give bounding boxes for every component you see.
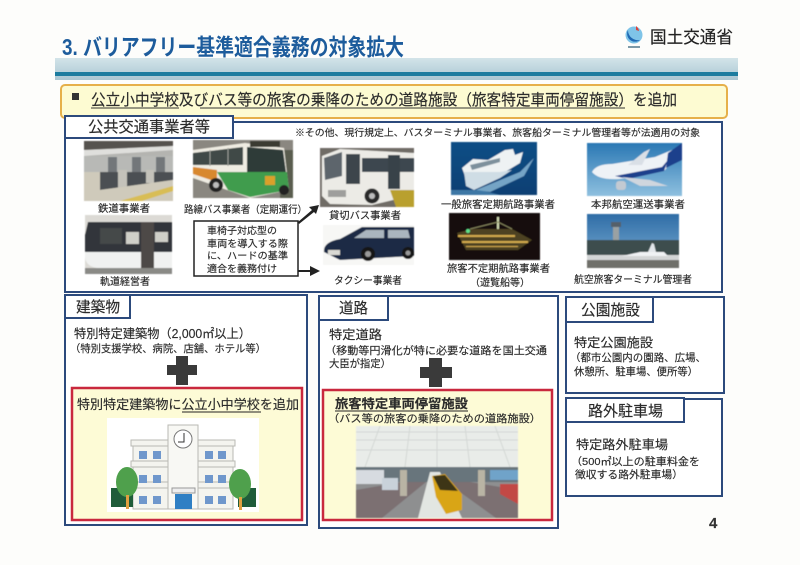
- panel: buildings: [65, 295, 307, 525]
- tab: buildings heading: 建築物: [76, 298, 120, 316]
- callout: passenger vehicle stops: [323, 390, 552, 520]
- title: 3. バリアフリー基準適合義務の対象拡大: [62, 34, 404, 60]
- text: special buildings: 特別特定建築物（2,000㎡以上）: [74, 326, 251, 341]
- tab: roads heading: [319, 296, 388, 320]
- panel: parks: [566, 297, 724, 393]
- label: chartered bus operators: 貸切バス事業者: [329, 209, 401, 222]
- tab: public transport heading: [65, 116, 233, 138]
- photo: passenger ferry: [451, 142, 537, 195]
- text: specified roads: 大臣が指定）: [329, 357, 391, 370]
- panel: off-road parking: [566, 398, 722, 496]
- arrow: to chartered bus: [298, 205, 319, 224]
- panel: roads: [319, 296, 558, 528]
- photo: airport terminal: [587, 214, 679, 268]
- tab: buildings heading: [65, 295, 130, 318]
- callout: wheelchair vehicle obligation: [194, 221, 298, 276]
- photo: airliner: [587, 143, 682, 196]
- icon: plus: [420, 358, 452, 387]
- callout: added public schools: [72, 388, 302, 520]
- text: specified parks: 休憩所、駐車場、便所等）: [574, 365, 698, 378]
- photo: route bus: [193, 140, 293, 198]
- callout: wheelchair vehicle obligation: 適合を義務付け: [207, 262, 277, 275]
- callout: wheelchair vehicle obligation: に、ハードの基準: [207, 249, 288, 262]
- icon: plus: [167, 356, 197, 385]
- callout: passenger vehicle stops: 旅客特定車両停留施設: [335, 396, 469, 411]
- header band: [55, 58, 738, 80]
- text: special buildings: [70, 326, 266, 355]
- text: specified parking: [571, 437, 700, 481]
- text: special buildings: （特別支援学校、病院、店舗、ホテル等）: [70, 342, 266, 355]
- label: railway operators: 鉄道事業者: [98, 202, 150, 215]
- callout: added public schools: 特別特定建築物に公立小中学校を追加: [77, 397, 299, 412]
- text: specified roads: 特定道路: [329, 327, 383, 342]
- logo: ministry emblem and name: [626, 26, 733, 48]
- text: specified parking: （500㎡以上の駐車料金を: [571, 455, 700, 468]
- label: scheduled passenger shipping: 一般旅客定期航路事業者: [441, 198, 555, 211]
- photo: railway platform: [84, 141, 173, 201]
- note: other applicable operators: ※その他、現行規定上、バスターミナル事業者、旅客船ターミナル管理者等が法適用の対象: [295, 127, 701, 139]
- tab: parks heading: 公園施設: [581, 302, 640, 319]
- callout: wheelchair vehicle obligation: 車椅子対応型の: [207, 224, 277, 237]
- page number: 4: [709, 515, 718, 532]
- logo: ministry emblem and name: 国土交通省: [650, 28, 733, 47]
- panel: public transport operators: [65, 116, 722, 292]
- label: airport terminal managers: 航空旅客ターミナル管理者: [574, 273, 692, 286]
- photo: taxi: [323, 225, 414, 265]
- label: non-scheduled passenger shipping: 旅客不定期航路事業者: [447, 262, 550, 275]
- text: specified parks: [570, 335, 706, 378]
- photo: tram: [85, 215, 172, 274]
- text: specified roads: [325, 327, 548, 370]
- text: specified parks: 特定公園施設: [574, 335, 654, 350]
- photo: chartered bus: [320, 148, 414, 207]
- tab: parks heading: [566, 297, 653, 322]
- text: specified roads: （移動等円滑化が特に必要な道路を国土交通: [325, 344, 548, 357]
- tab: public transport heading: 公共交通事業者等: [88, 118, 210, 136]
- label: track operators: 軌道経営者: [100, 275, 150, 288]
- tab: parking heading: [566, 398, 684, 422]
- label: taxi operators: タクシー事業者: [334, 274, 402, 287]
- label: domestic air carriers: 本邦航空運送事業者: [591, 198, 685, 211]
- label: non-scheduled passenger shipping: [447, 262, 550, 289]
- label: route bus operators: 路線バス事業者（定期運行）: [184, 203, 307, 216]
- photo: bus terminal interior: [356, 426, 518, 518]
- photo: night cruise boat: [449, 213, 540, 260]
- callout: wheelchair vehicle obligation: 車両を導入する際: [207, 237, 288, 250]
- text: specified parking: 徴収する路外駐車場）: [575, 468, 683, 481]
- arrow: to taxi: [298, 266, 320, 276]
- banner: key message: [61, 85, 727, 118]
- text: specified parking: 特定路外駐車場: [576, 437, 668, 452]
- banner: key message: 公立小中学校及びバス等の旅客の乗降のための道路施設（旅客特定車両停留施設）を追加: [91, 91, 677, 109]
- tab: parking heading: 路外駐車場: [588, 403, 663, 420]
- label: non-scheduled passenger shipping: （遊覧船等）: [470, 276, 530, 289]
- icon: school building: [107, 418, 259, 512]
- tab: roads heading: 道路: [339, 300, 368, 317]
- callout: passenger vehicle stops: （バス等の旅客の乗降のための道路施設）: [328, 412, 541, 425]
- text: specified parks: （都市公園内の園路、広場、: [570, 351, 706, 364]
